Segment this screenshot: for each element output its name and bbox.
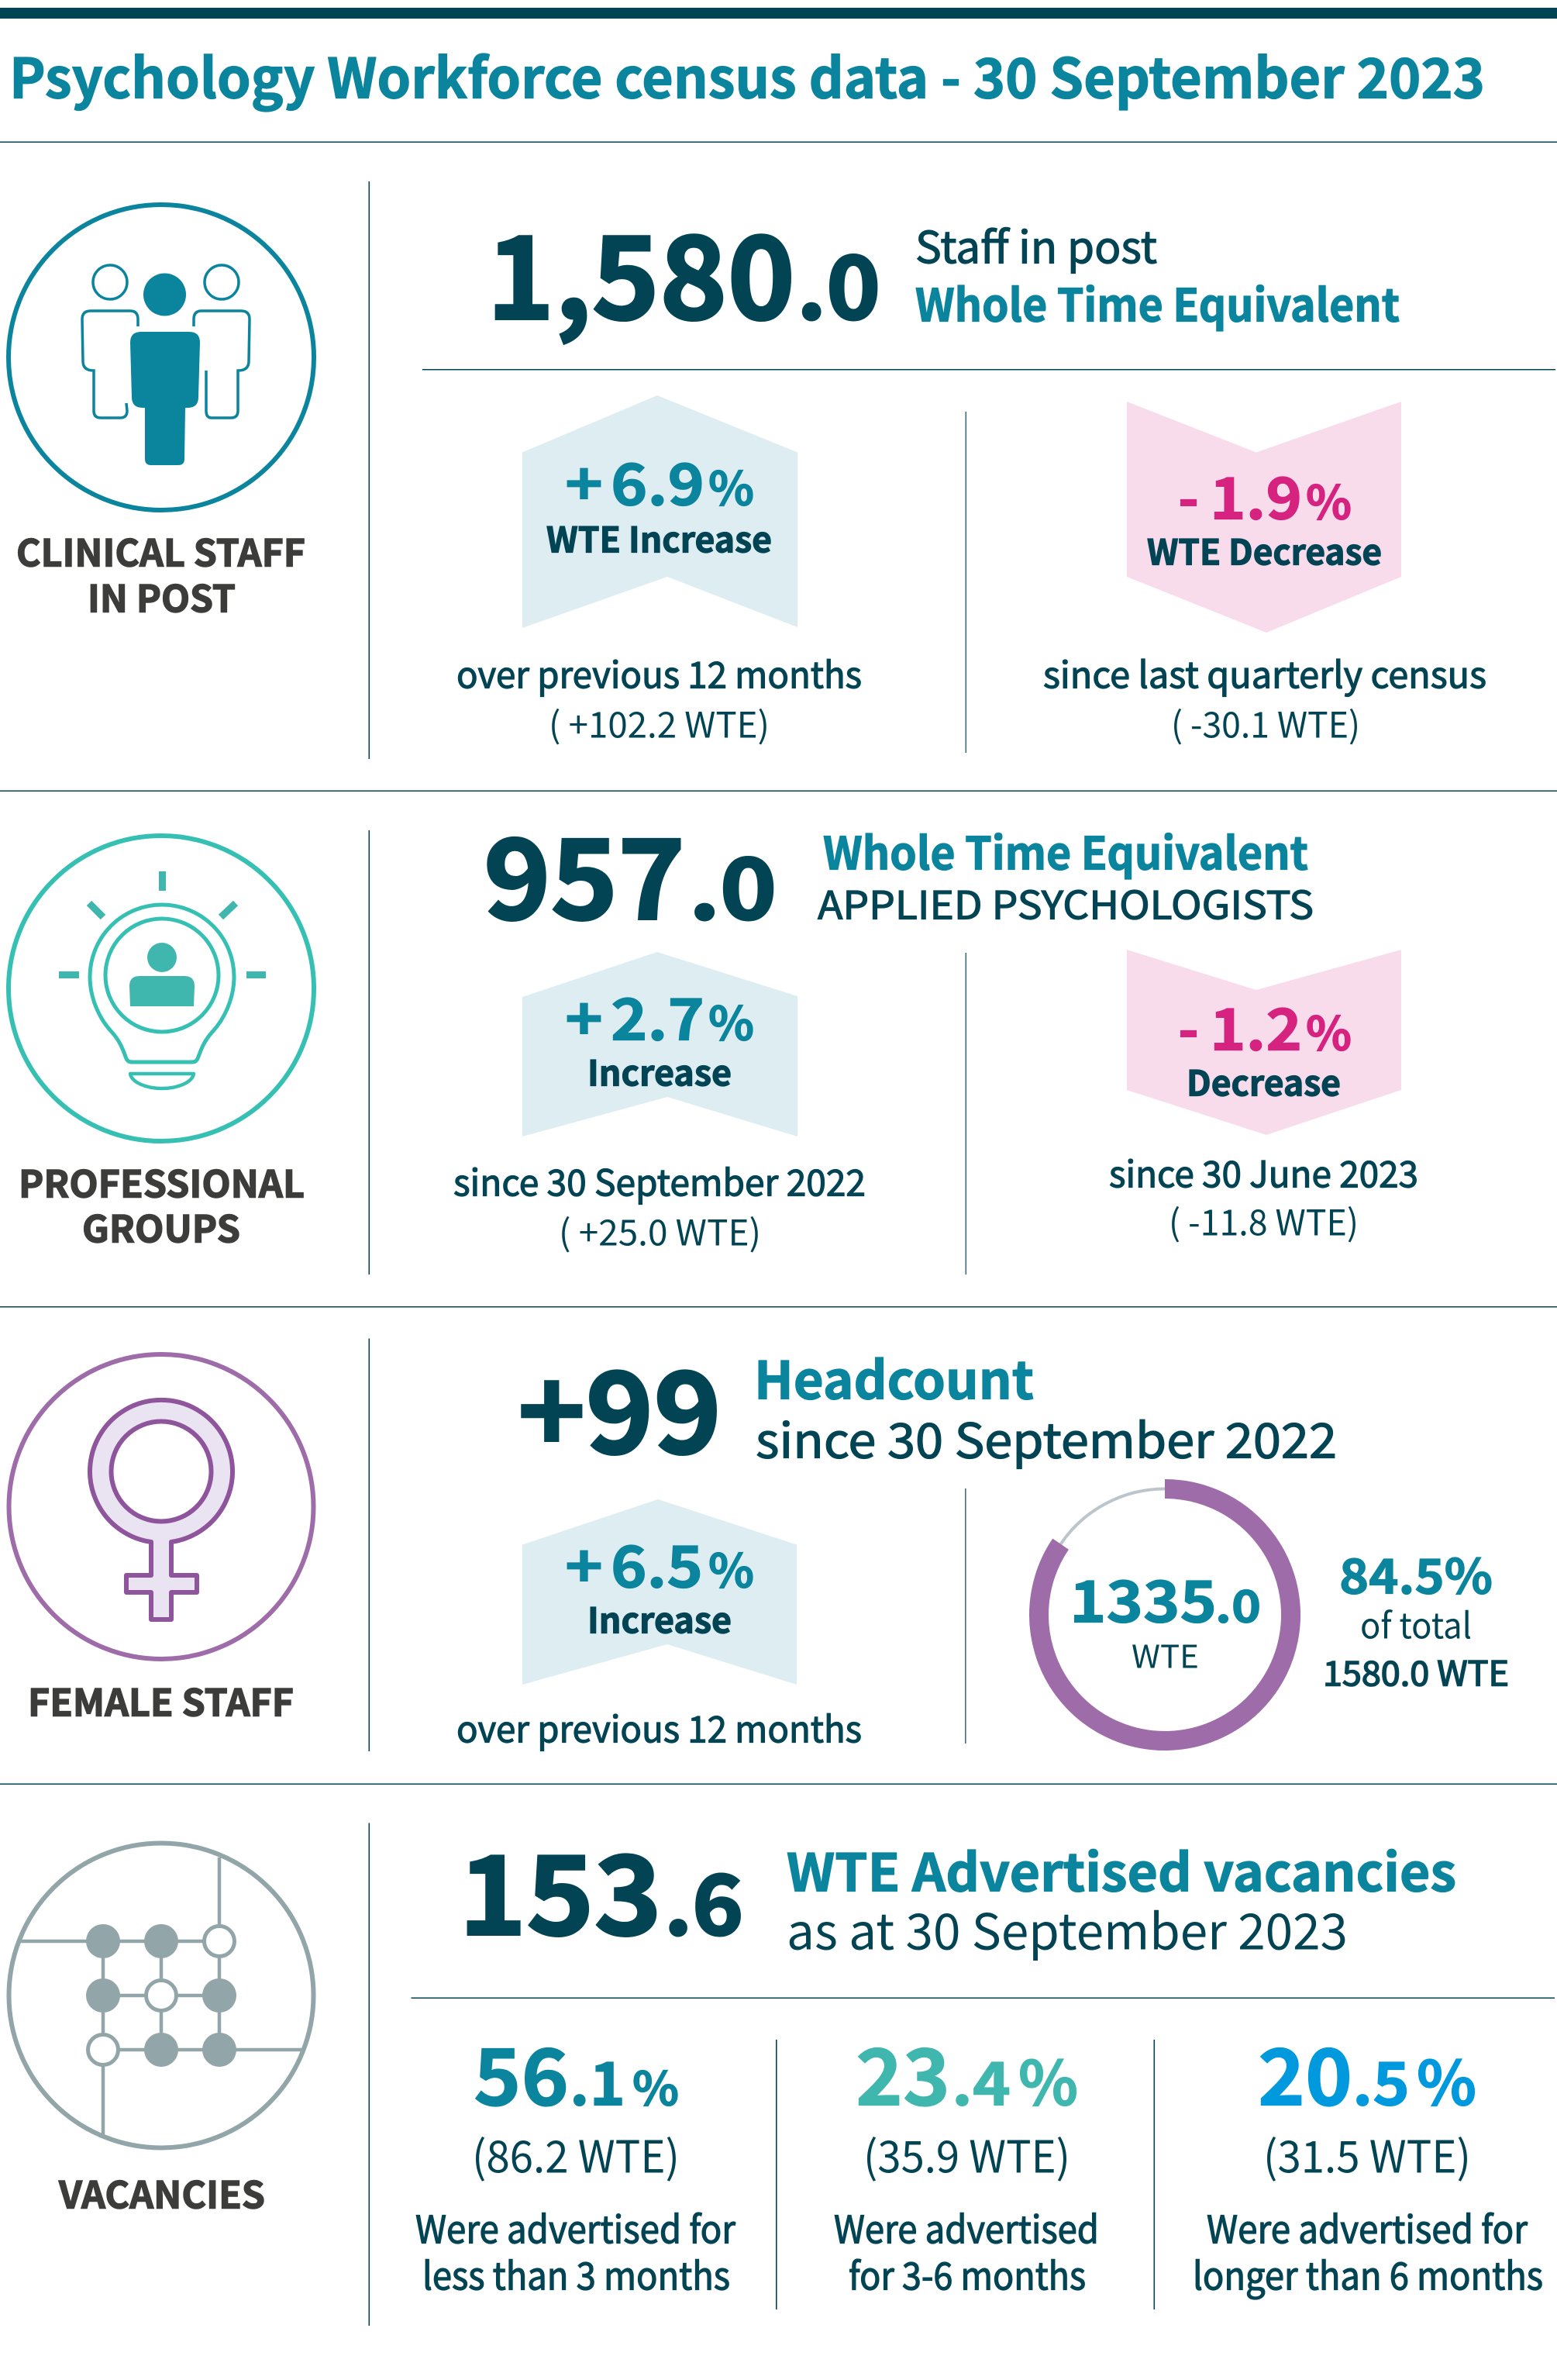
big number: staff in post: 1,580 bbox=[487, 186, 795, 352]
text: since last quarterly census: since last quarterly census bbox=[1043, 645, 1486, 699]
callout: 2.7 percent increase: Increase bbox=[587, 1045, 732, 1096]
text: whole time equivalent applied psychologists: APPLIED PSYCHOLOGISTS bbox=[818, 874, 1314, 930]
text: whole time equivalent applied psychologists: Whole Time Equivalent bbox=[823, 817, 1308, 882]
big number: +99: +99 bbox=[518, 1323, 722, 1485]
callout: 1.9 percent WTE decrease: WTE Decrease bbox=[1147, 524, 1382, 575]
stat: 23.4 percent 3-6 months: 23 bbox=[856, 2016, 950, 2129]
panel: vacancies bbox=[9, 1808, 1555, 2326]
text: since 30 June 2023: since 30 June 2023 bbox=[1109, 1144, 1418, 1199]
text: staff in post whole time equivalent bbox=[915, 212, 1400, 335]
text: over previous 12 months: ( +102.2 WTE) bbox=[549, 698, 770, 749]
text: 84.5 percent of total 1580.0 WTE: 84.5% bbox=[1339, 1538, 1493, 1608]
text: headcount since 30 September 2022 bbox=[754, 1340, 1337, 1471]
stat: 56.1 percent under 3 months: % bbox=[632, 2051, 679, 2120]
callout: 6.9 percent WTE increase bbox=[522, 395, 797, 628]
callout: 6.9 percent WTE increase: + bbox=[565, 439, 603, 523]
text: since 30 September 2022 bbox=[453, 1154, 866, 1256]
big number: 153.6 bbox=[459, 1808, 743, 1966]
heading: vacancies: VACANCIES bbox=[58, 2164, 265, 2219]
callout: 6.5 percent increase: % bbox=[708, 1533, 754, 1602]
stat: 23.4 percent 3-6 months: for 3-6 months bbox=[849, 2247, 1086, 2301]
heading: professional groups: PROFESSIONAL bbox=[19, 1154, 305, 1208]
icon: clinical staff group in circle bbox=[9, 205, 314, 510]
text: since 30 September 2022: ( +25.0 WTE) bbox=[559, 1205, 761, 1256]
big number: 153.6: 153 bbox=[459, 1808, 662, 1966]
stat: 56.1 percent under 3 months bbox=[415, 2016, 736, 2301]
text: headcount since 30 September 2022: since 30 September 2022 bbox=[756, 1402, 1337, 1471]
title: Psychology Workforce census data - 30 September 2023 bbox=[9, 36, 1485, 115]
stat: 56.1 percent under 3 months: Were advertised for bbox=[415, 2200, 736, 2254]
stat: 56.1 percent under 3 months: .1 bbox=[570, 2037, 625, 2123]
heading: professional groups bbox=[19, 1154, 305, 1253]
callout: 2.7 percent increase: + bbox=[565, 974, 603, 1057]
callout: 2.7 percent increase: % bbox=[708, 986, 754, 1054]
panel: professional groups bbox=[9, 791, 1418, 1275]
icon: female symbol in circle bbox=[9, 1354, 313, 1659]
stat: 56.1 percent under 3 months: less than 3 months bbox=[422, 2247, 730, 2301]
text: WTE advertised vacancies bbox=[787, 1831, 1456, 1964]
text: over previous 12 months: over previous 12 months bbox=[456, 1699, 862, 1754]
stat: 56.1 percent under 3 months: (86.2 WTE) bbox=[472, 2123, 680, 2186]
text: headcount since 30 September 2022: Headcount bbox=[754, 1340, 1034, 1414]
stat: 23.4 percent 3-6 months bbox=[834, 2016, 1099, 2301]
chart: donut 84.5 percent bbox=[1039, 1488, 1291, 1741]
big number: 957.0: 957 bbox=[484, 791, 685, 952]
stat: 56.1 percent under 3 months: 56 bbox=[474, 2016, 569, 2129]
callout: 1.2 percent decrease: Decrease bbox=[1187, 1056, 1341, 1105]
big number: 957.0: .0 bbox=[689, 822, 777, 944]
text: 84.5 percent of total 1580.0 WTE bbox=[1323, 1538, 1509, 1696]
text: whole time equivalent applied psychologists bbox=[818, 817, 1314, 930]
stat: 20.5 percent over 6 months: 20 bbox=[1258, 2016, 1352, 2129]
text: staff in post whole time equivalent: Staff in post bbox=[915, 212, 1157, 276]
callout: 1.9 percent WTE decrease bbox=[1127, 402, 1401, 633]
callout: 1.9 percent WTE decrease: % bbox=[1306, 465, 1352, 533]
callout: 1.9 percent WTE decrease: - bbox=[1178, 453, 1199, 536]
heading: female staff: FEMALE STAFF bbox=[28, 1673, 294, 1727]
callout: 1.2 percent decrease: 1.2 bbox=[1210, 985, 1302, 1067]
text: 84.5 percent of total 1580.0 WTE: of total bbox=[1360, 1599, 1472, 1650]
text: since last quarterly census: ( -30.1 WTE) bbox=[1171, 698, 1360, 749]
text: since last quarterly census bbox=[1043, 645, 1486, 749]
panel: female staff bbox=[9, 1323, 1509, 1754]
stat: 20.5 percent over 6 months bbox=[1193, 2016, 1543, 2301]
text: WTE advertised vacancies: as at 30 September 2023 bbox=[787, 1893, 1348, 1964]
text: since 30 June 2023 bbox=[1109, 1144, 1418, 1247]
text: staff in post whole time equivalent: Whole Time Equivalent bbox=[915, 270, 1400, 335]
stat: 23.4 percent 3-6 months: % bbox=[1018, 2034, 1078, 2123]
callout: 2.7 percent increase: 2.7 bbox=[611, 974, 704, 1057]
callout: 1.2 percent decrease: - bbox=[1178, 985, 1199, 1067]
heading: clinical staff in post bbox=[16, 523, 305, 623]
callout: 2.7 percent increase bbox=[522, 952, 797, 1137]
stat: 23.4 percent 3-6 months: .4 bbox=[952, 2037, 1011, 2123]
heading: professional groups: GROUPS bbox=[82, 1199, 240, 1253]
text: over previous 12 months: over previous 12 months bbox=[456, 645, 862, 699]
text: since 30 June 2023: ( -11.8 WTE) bbox=[1169, 1195, 1359, 1247]
stat: 20.5 percent over 6 months: Were advertised for bbox=[1207, 2200, 1528, 2254]
chart: donut 84.5 percent: WTE bbox=[1132, 1631, 1199, 1678]
text: WTE advertised vacancies: WTE Advertised vacancies bbox=[787, 1831, 1456, 1907]
heading: clinical staff in post: IN POST bbox=[88, 569, 236, 623]
text: since 30 September 2022: since 30 September 2022 bbox=[453, 1154, 866, 1206]
callout: 6.5 percent increase bbox=[522, 1499, 797, 1685]
stat: 23.4 percent 3-6 months: Were advertised bbox=[834, 2200, 1099, 2254]
stat: 20.5 percent over 6 months: % bbox=[1417, 2034, 1476, 2123]
chart: donut 84.5 percent: .0 bbox=[1215, 1572, 1261, 1636]
chart: donut 84.5 percent: 1335 bbox=[1070, 1557, 1217, 1639]
big number: staff in post: .0 bbox=[797, 217, 880, 344]
callout: 6.5 percent increase: 6.5 bbox=[611, 1521, 703, 1605]
stat: 20.5 percent over 6 months: (31.5 WTE) bbox=[1263, 2123, 1471, 2186]
text: 84.5 percent of total 1580.0 WTE: 1580.0 WTE bbox=[1323, 1647, 1509, 1696]
text: over previous 12 months bbox=[456, 645, 862, 749]
callout: 1.2 percent decrease bbox=[1127, 950, 1401, 1135]
callout: 6.9 percent WTE increase: 6.9 bbox=[611, 439, 704, 523]
callout: 6.9 percent WTE increase: % bbox=[708, 451, 754, 519]
heading: clinical staff in post: CLINICAL STAFF bbox=[16, 523, 305, 577]
big number: 957.0 bbox=[484, 791, 777, 952]
stat: 20.5 percent over 6 months: .5 bbox=[1352, 2037, 1410, 2123]
callout: 6.5 percent increase: Increase bbox=[587, 1592, 732, 1644]
icon: vacancies node grid in circle bbox=[9, 1844, 313, 2147]
callout: 1.9 percent WTE decrease: 1.9 bbox=[1210, 453, 1302, 536]
big number: 153.6: .6 bbox=[664, 1839, 743, 1958]
callout: 6.5 percent increase: + bbox=[565, 1521, 603, 1605]
callout: 6.9 percent WTE increase: WTE Increase bbox=[546, 512, 772, 563]
panel: clinical staff in post bbox=[9, 181, 1555, 759]
stat: 23.4 percent 3-6 months: (35.9 WTE) bbox=[863, 2123, 1070, 2186]
icon: light bulb with person in circle bbox=[9, 836, 314, 1141]
callout: 1.2 percent decrease: % bbox=[1306, 997, 1352, 1064]
